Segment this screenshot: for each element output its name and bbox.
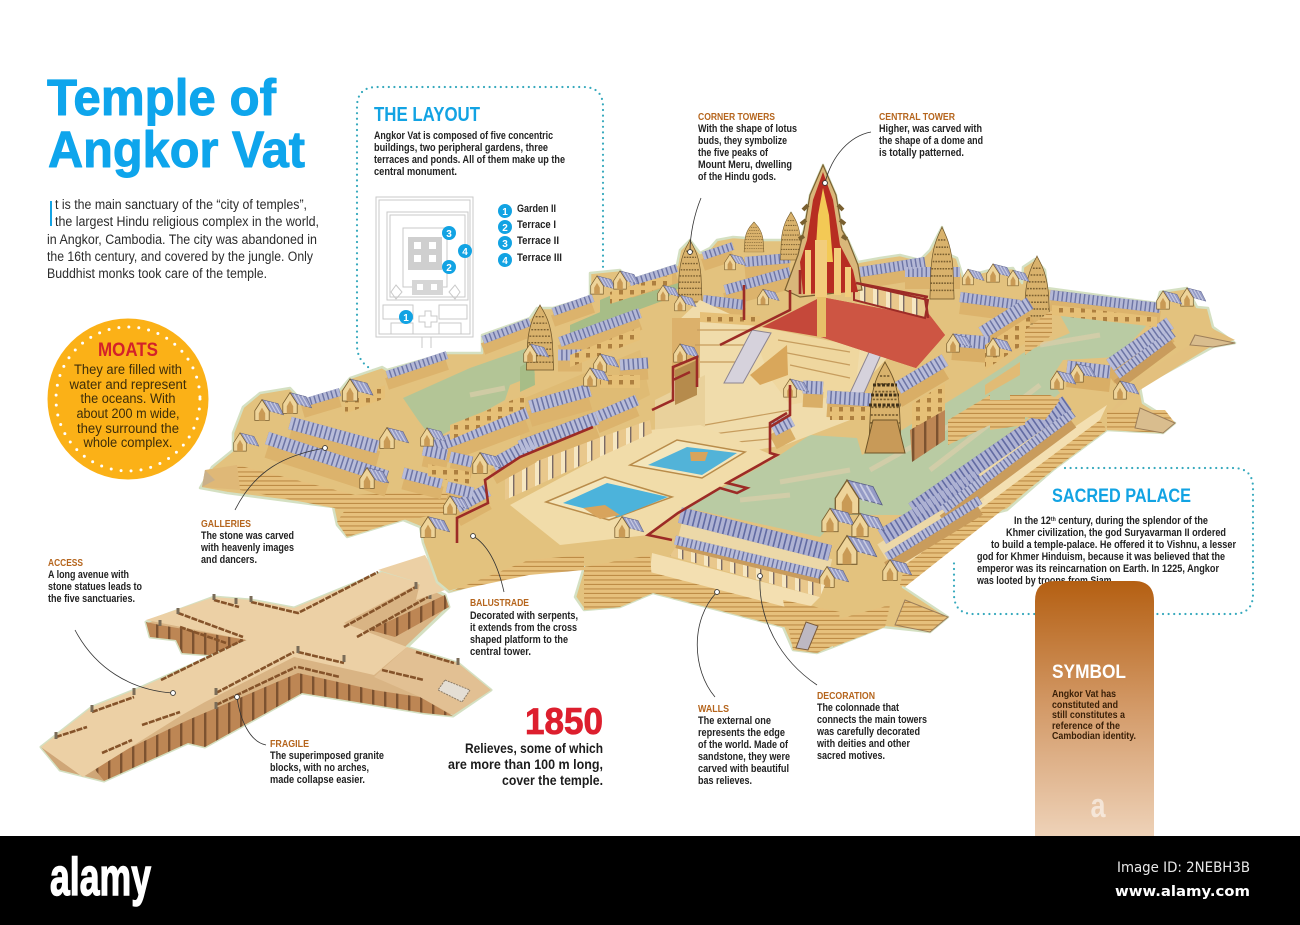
- illustration: lawns: [403, 270, 1147, 537]
- label: balustrade: central tower.: [470, 646, 531, 658]
- illustration: back galleries: [303, 246, 1160, 412]
- plan legend: Terrace II: [517, 235, 559, 247]
- illustration: corner stairs: [202, 335, 1235, 653]
- wall: west: [237, 465, 355, 512]
- moats text: They are filled with: [74, 362, 182, 377]
- label: balustrade: shaped platform to the: [470, 634, 568, 646]
- heading: sacred palace: SACRED PALACE: [1052, 486, 1191, 507]
- layout description: central monument.: [374, 166, 457, 178]
- label: galleries: GALLERIES: [201, 518, 251, 530]
- heading: symbol: SYMBOL: [1052, 662, 1126, 683]
- stat caption: cover the temple.: [502, 772, 603, 788]
- plan legend: Terrace III: [517, 252, 562, 264]
- plan number markers: [399, 226, 472, 324]
- sacred palace text: god for Khmer Hinduism, because it was believed that the: [977, 551, 1225, 563]
- label: corner towers: of the Hindu gods.: [698, 171, 776, 183]
- lower terrace: [374, 647, 491, 715]
- label: decoration: with deities and other: [816, 738, 910, 750]
- footer url: www.alamy.com: [1115, 884, 1250, 900]
- heading: the layout: THE LAYOUT: [374, 104, 480, 126]
- stat caption: Relieves, some of which: [465, 740, 603, 756]
- stat caption: [448, 740, 603, 788]
- stat: 1850: [448, 701, 603, 788]
- illustration: front galleries: [267, 303, 1173, 585]
- stat caption: are more than 100 m long,: [448, 756, 603, 772]
- plan legend: 2: [502, 223, 508, 234]
- stairs: [438, 680, 470, 702]
- symbol text: constituted and: [1052, 700, 1118, 711]
- plan legend: Garden II: [517, 203, 556, 215]
- illustration: windowed gallery walls: [345, 274, 1157, 484]
- intro text: Buddhist monks took care of the temple.: [47, 266, 267, 281]
- label: corner towers: CORNER TOWERS: [698, 111, 775, 123]
- illustration: outer walls: [202, 330, 1235, 627]
- illustration: red pyramid: [762, 297, 945, 368]
- label: central tower: CENTRAL TOWER: [879, 111, 955, 123]
- panel: symbol: [1035, 581, 1154, 836]
- label: decoration: was carefully decorated: [816, 726, 920, 738]
- balustrades: [56, 572, 454, 753]
- plan legend: 4: [502, 256, 508, 267]
- label: walls: [698, 703, 790, 787]
- wall: east: [900, 420, 1107, 587]
- label: decoration: connects the main towers: [817, 714, 927, 726]
- label: walls: represents the edge: [698, 727, 785, 739]
- label: corner towers: buds, they symbolize: [698, 135, 787, 147]
- sacred palace text: to build a temple-palace. He offered it to Vishnu, a lesser: [991, 539, 1236, 551]
- side walls: [41, 595, 453, 781]
- title: Temple of: [47, 69, 277, 126]
- moats text: the oceans. With: [80, 391, 176, 406]
- label: access: [48, 557, 142, 605]
- label: decoration: The colonnade that: [817, 702, 899, 714]
- plan legend: 1: [502, 207, 508, 218]
- plan number markers: 2: [446, 263, 452, 274]
- sacred palace text: was looted by troops from Siam.: [976, 575, 1114, 587]
- footer bar: [0, 836, 1300, 925]
- footer image id: Image ID: 2NEBH3B: [1117, 860, 1250, 876]
- label: galleries: [200, 518, 294, 566]
- layout description: buildings, two peripheral gardens, three: [374, 142, 548, 154]
- label: walls: sandstone, they were: [698, 751, 790, 763]
- label: galleries: and dancers.: [201, 554, 257, 566]
- symbol text: [1052, 689, 1136, 742]
- illustration: cross platform: [41, 572, 491, 781]
- label: fragile: blocks, with no arches,: [270, 762, 369, 774]
- platform footprint: [41, 572, 491, 781]
- intro text: in Angkor, Cambodia. The city was abandoned in: [47, 232, 317, 247]
- illustration: causeway: [378, 555, 445, 600]
- illustration: temple ground: [200, 165, 1235, 653]
- sacred palace text: [976, 515, 1236, 587]
- symbol text: reference of the: [1052, 721, 1120, 732]
- footer logo: alamy: [50, 848, 151, 907]
- wall: south front: [650, 572, 805, 627]
- label: access: ACCESS: [48, 557, 83, 569]
- panel: sacred palace: [954, 468, 1253, 614]
- plan legend: [498, 203, 562, 267]
- illustration: central tower: [785, 165, 862, 297]
- sacred palace text: th: [1051, 517, 1056, 523]
- sacred palace text: Khmer civilization, the god Suryavarman II ordered: [1006, 527, 1226, 539]
- label: galleries: with heavenly images: [200, 542, 294, 554]
- illustration: south gallery base: [670, 548, 825, 597]
- label: fragile: The superimposed granite: [270, 750, 384, 762]
- label: access: A long avenue with: [48, 569, 129, 581]
- label: decoration: DECORATION: [817, 690, 875, 702]
- moats text: water and represent: [69, 377, 187, 392]
- plan number markers: 3: [446, 229, 452, 240]
- moats text: about 200 m wide,: [76, 406, 180, 421]
- callout: moats: [48, 318, 208, 480]
- illustration: pavilions: [234, 254, 1206, 587]
- label: central tower: the shape of a dome and: [879, 135, 983, 147]
- title: Angkor Vat: [48, 121, 305, 178]
- label: balustrade: [470, 597, 578, 658]
- label: central tower: Higher, was carved with: [879, 123, 982, 135]
- label: corner towers: Mount Meru, dwelling: [698, 159, 792, 171]
- intro text: the 16th century, and covered by the jungle. Only: [47, 249, 313, 264]
- label: walls: bas relieves.: [698, 775, 752, 787]
- plan legend: Terrace I: [517, 219, 556, 231]
- title: [47, 69, 305, 178]
- label: balustrade: it extends from the cross: [470, 622, 577, 634]
- moats text: whole complex.: [83, 435, 172, 450]
- label: access: stone statues leads to: [48, 581, 142, 593]
- stat: 1850: 1850: [525, 701, 603, 742]
- statues: [56, 582, 458, 739]
- sacred palace text: century, during the splendor of the: [1056, 515, 1208, 527]
- intro text: t is the main sanctuary of the “city of temples”,: [55, 197, 307, 212]
- label: central tower: is totally patterned.: [879, 147, 964, 159]
- label: galleries: The stone was carved: [201, 530, 294, 542]
- label: decoration: [816, 690, 927, 762]
- label: access: the five sanctuaries.: [48, 593, 135, 605]
- label: balustrade: BALUSTRADE: [470, 597, 529, 609]
- intro text: the largest Hindu religious complex in the world,: [55, 214, 319, 229]
- plan number markers: 4: [462, 247, 468, 258]
- label: decoration: sacred motives.: [817, 750, 885, 762]
- panel: the layout: [357, 87, 603, 370]
- sacred palace text: In the 12: [1014, 515, 1057, 527]
- illustration: central terrace: [655, 300, 890, 460]
- label: corner towers: With the shape of lotus: [698, 123, 797, 135]
- illustration: colonnade behind pyramid: [854, 283, 928, 318]
- label: balustrade: Decorated with serpents,: [470, 610, 578, 622]
- tower: front corner: [865, 362, 905, 453]
- symbol text: still constitutes a: [1052, 710, 1125, 721]
- label: walls: carved with beautiful: [698, 763, 789, 775]
- plan drawing: [376, 197, 473, 348]
- symbol text: Angkor Vat has: [1052, 689, 1116, 700]
- sacred palace text: emperor was its reincarnation on Earth. In 1225, Angkor: [977, 563, 1219, 575]
- watermark letter: a: [1090, 787, 1106, 825]
- intro text: I: [48, 193, 54, 234]
- moats text: [69, 362, 187, 450]
- callout leader lines: [75, 132, 871, 745]
- layout description: [374, 130, 565, 178]
- plan legend: 3: [502, 239, 508, 250]
- layout description: terraces and ponds. All of them make up the: [374, 154, 565, 166]
- symbol text: Cambodian identity.: [1052, 731, 1136, 742]
- illustration: ponds: [546, 440, 745, 520]
- tower: back right: [930, 227, 954, 299]
- label: central tower: [879, 111, 983, 159]
- moats text: they surround the: [77, 421, 179, 436]
- tower: back left corner: [678, 240, 702, 302]
- label: fragile: made collapse easier.: [270, 774, 365, 786]
- layout description: Angkor Vat is composed of five concentric: [374, 130, 553, 142]
- tower: back inner: [744, 222, 764, 252]
- platform surface: [41, 572, 420, 777]
- label: fragile: FRAGILE: [270, 738, 309, 750]
- label: walls: of the world. Made of: [698, 739, 788, 751]
- label: walls: WALLS: [698, 703, 729, 715]
- label: corner towers: the five peaks of: [698, 147, 768, 159]
- plan number markers: 1: [403, 313, 409, 324]
- label: walls: The external one: [698, 715, 771, 727]
- label: fragile: [270, 738, 384, 786]
- tower: left corner: [526, 305, 554, 370]
- illustration: courtyard: [505, 350, 777, 545]
- moats heading: MOATS: [98, 340, 158, 361]
- tower: right corner: [1024, 256, 1050, 324]
- illustration: red section lines: [457, 270, 928, 543]
- label: corner towers: [698, 111, 797, 183]
- intro text: [47, 193, 319, 281]
- tower: back middle: [780, 212, 802, 260]
